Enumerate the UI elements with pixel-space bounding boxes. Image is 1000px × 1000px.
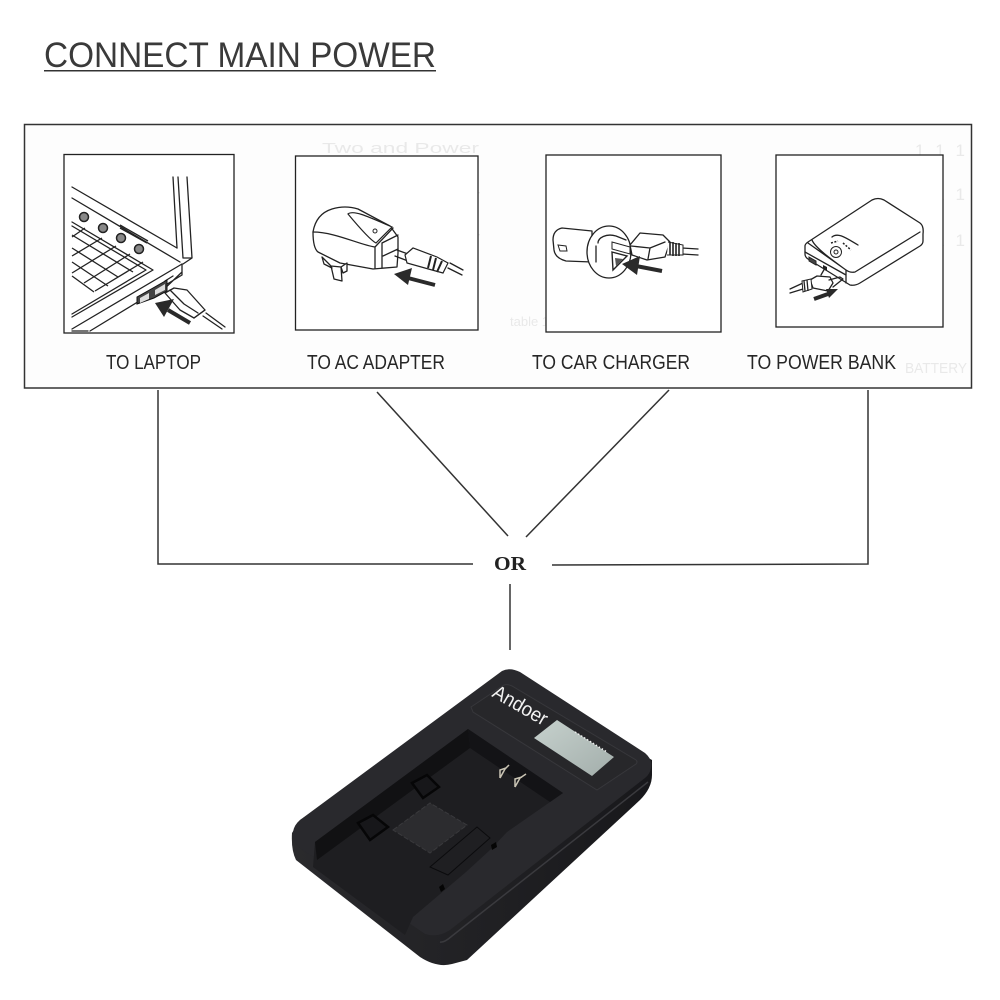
rating label	[393, 803, 467, 853]
charger side walls	[292, 680, 652, 965]
icon panel: laptop	[64, 154, 234, 333]
charger top face	[293, 669, 651, 935]
connector: down to charger	[509, 584, 511, 650]
panel frame	[24, 124, 972, 388]
faint show-through text: BATTERY	[905, 360, 967, 377]
faint show-through text: Three and Power	[365, 187, 480, 204]
clip	[358, 815, 388, 840]
battery compartment detail	[430, 827, 490, 875]
latch holes	[439, 842, 497, 892]
icon panel: car charger	[546, 155, 721, 332]
label: to laptop: TO LAPTOP	[106, 352, 201, 374]
label: to car charger: TO CAR CHARGER	[532, 352, 690, 374]
label: to AC adapter: TO AC ADAPTER	[307, 352, 445, 374]
faint show-through text: 1 1 1	[915, 231, 965, 250]
title: CONNECT MAIN POWER	[44, 36, 436, 75]
battery charger photo	[292, 669, 652, 965]
LCD screen	[534, 720, 614, 776]
faint show-through text: 1 1 1	[915, 141, 965, 160]
connector: left bracket	[158, 390, 473, 564]
connector: left diagonal	[377, 392, 508, 536]
connector: right bracket	[552, 390, 868, 565]
faint show-through text	[322, 140, 967, 377]
panel: connection options	[24, 124, 972, 388]
battery recess	[313, 729, 563, 935]
contacts	[500, 765, 526, 787]
icon panel: AC adapter	[296, 156, 478, 330]
label: to power bank: TO POWER BANK	[747, 352, 897, 374]
faint show-through text: table 1	[510, 314, 549, 329]
brand logo: Andoer	[488, 681, 552, 730]
OR label: OR	[494, 553, 527, 575]
raised display panel	[471, 685, 637, 790]
connector: right diagonal	[526, 390, 669, 537]
faint show-through text: Full Power	[409, 229, 480, 246]
clip	[412, 775, 439, 798]
faint show-through text: Two and Power	[322, 140, 479, 157]
icon panel: power bank	[776, 155, 943, 327]
faint show-through text: 1 1 1	[915, 185, 965, 204]
